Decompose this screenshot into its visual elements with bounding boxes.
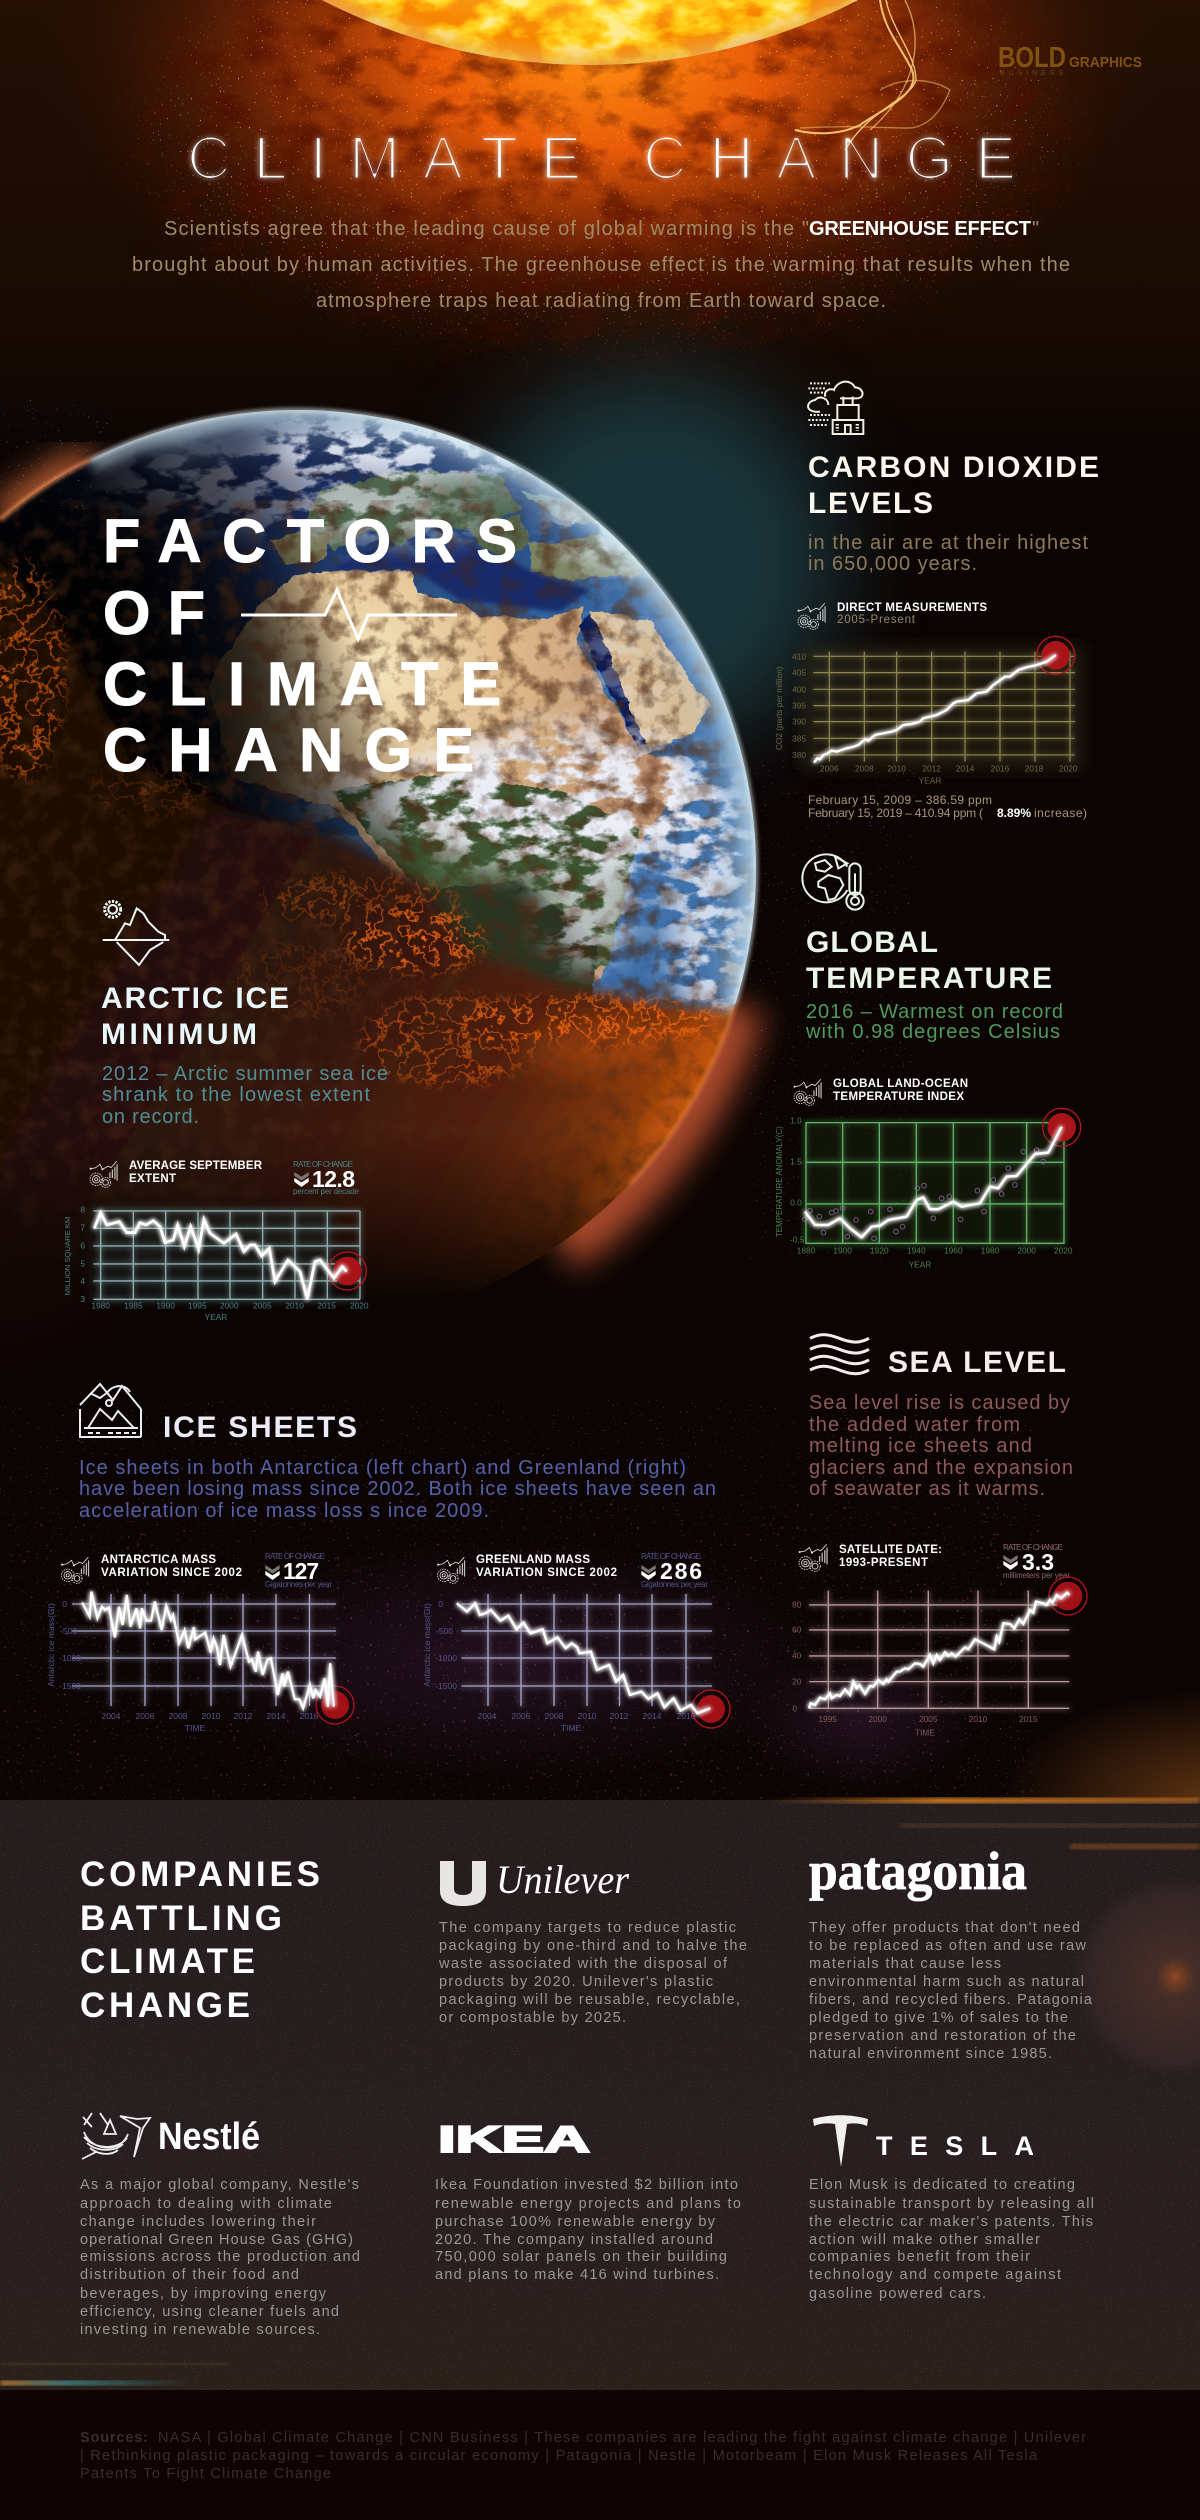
text: highest in 650,000 years: [808, 532, 1088, 575]
text: lowest extent: on record.: [102, 1106, 199, 1128]
icon: snowy mountains: [80, 1384, 141, 1437]
intro text: [132, 218, 1070, 312]
text: sources: Patents To Fight Climate Change: [80, 2466, 331, 2482]
heading: companies battling climate change: CLIMATE: [80, 1942, 255, 1981]
logo: unilever: [440, 1857, 629, 1906]
earth: mediterranean: [330, 540, 590, 612]
chart: sea level: 2000: [868, 1714, 887, 1724]
chart: sea level: 80: [792, 1600, 802, 1610]
section: carbon dioxide: [774, 382, 1099, 820]
chart: CO2: 2008: [855, 763, 874, 773]
chart title: average september extent: [90, 1160, 263, 1187]
chart: arctic extent: 8: [80, 1205, 85, 1215]
chart: CO2: 395: [792, 701, 806, 711]
stat: rate of change 12.8: [293, 1160, 360, 1196]
text: nestle: beverages, by improving energy: [80, 2286, 327, 2302]
chart: CO2: 400: [792, 684, 806, 694]
chart: temperature: 0.0: [790, 1198, 802, 1208]
text: patagonia: fibers, and recycled fibers. Patagonia: [809, 1992, 1093, 2008]
chart: sea level: [792, 1577, 1087, 1737]
text: ice sheets description: [79, 1457, 716, 1522]
sun: [322, 0, 858, 65]
chart: CO2: 385: [792, 733, 806, 743]
chart: temperature: 1920: [870, 1246, 889, 1256]
intro text: atmosphere traps heat radiating from Earth toward space.: [316, 290, 886, 312]
chart: sea level: 2015: [1019, 1714, 1038, 1724]
text: patagonia: preservation and restoration of the: [809, 2028, 1076, 2044]
text: sea level description: the added water from: [809, 1414, 1020, 1436]
text: unilever: or compostable by 2025.: [439, 2010, 626, 2026]
text: nestle: emissions across the production and: [80, 2249, 360, 2265]
logo: ikea: IKEA: [438, 2119, 590, 2160]
text: patagonia: [809, 1920, 1093, 2062]
chart: antarctica: 2010: [202, 1711, 221, 1721]
chart: temperature: 1940: [907, 1246, 926, 1256]
stat: rate of change 127: RATE OF CHANGE: [265, 1552, 325, 1561]
section: sea level: [792, 1335, 1087, 1737]
title: CLIMATE CHANGE: [187, 124, 1016, 192]
chart: CO2: 390: [792, 717, 806, 727]
chart title: satellite data: 1993-PRESENT: [839, 1557, 928, 1569]
icon: factory and clouds: [808, 382, 863, 434]
intro text: Scientists agree that the leading cause of global warming is the ": [164, 218, 809, 240]
text: unilever: waste associated with the disposal of: [438, 1956, 728, 1972]
chart: temperature: [775, 1108, 1081, 1270]
text: nestle: efficiency, using cleaner fuels and: [80, 2304, 339, 2320]
stat: rate of change 12.8: 12.8: [312, 1166, 355, 1192]
chart: antarctica: [46, 1592, 354, 1733]
section: arctic ice minimum: [63, 901, 388, 1322]
heading: factors of climate change: CHANGE: [103, 716, 474, 784]
chart: sea level: 0: [792, 1703, 797, 1713]
heading: ice sheets: ICE SHEETS: [163, 1411, 357, 1444]
logo: nestle: [82, 2113, 260, 2159]
chart: CO2: 405: [792, 668, 806, 678]
icon: sun and iceberg: [103, 901, 169, 965]
earth: bright rim: [90, 404, 760, 1005]
text: tesla: action will make other smaller: [809, 2232, 1040, 2248]
heading: factors of climate change: [103, 507, 517, 784]
heading: companies battling climate change: COMPANIES: [80, 1855, 320, 1894]
text: unilever: products by 2020. Unilever's plastic: [439, 1974, 713, 1990]
text: ice sheets description: acceleration of ice mass loss s ince 2009.: [79, 1500, 489, 1522]
company: tesla: [809, 2115, 1094, 2302]
intro text: GREENHOUSE EFFECT: [809, 218, 1031, 240]
text: patagonia: They offer products that don't need: [809, 1920, 1080, 1936]
heading: companies battling climate change: BATTLING: [80, 1899, 282, 1938]
text: sea level description: melting ice sheets and: [809, 1435, 1032, 1457]
chart title: antarctica mass variation: VARIATION SINCE 2002: [101, 1567, 242, 1579]
chart title: land-ocean index: TEMPERATURE INDEX: [833, 1091, 964, 1103]
chart: CO2: 380: [792, 750, 806, 760]
earth globe: [0, 410, 756, 1326]
heading: companies battling climate change: CHANGE: [80, 1986, 250, 2025]
text: lowest extent: 2012 – Arctic summer sea ice: [102, 1063, 388, 1085]
chart: antarctica: 2006: [136, 1711, 155, 1721]
chart: greenland: 2016: [677, 1711, 696, 1721]
chart: sea level: TIME: [915, 1727, 935, 1737]
chart: CO2: 2020: [1059, 763, 1078, 773]
text: tesla: technology and compete against: [809, 2267, 1061, 2283]
icon: globe and thermometer: [802, 854, 864, 910]
chart: antarctica: TIME: [185, 1723, 205, 1733]
text: tesla: the electric car maker's patents. This: [809, 2214, 1093, 2230]
text: sources: [80, 2430, 1086, 2482]
chart: temperature: 1.0: [790, 1116, 802, 1126]
company: patagonia: [809, 1841, 1093, 2062]
text: tesla: companies benefit from their: [809, 2249, 1030, 2265]
text: warmest on record: with 0.98 degrees Celsius: [805, 1021, 1060, 1043]
heading: carbon dioxide levels: LEVELS: [808, 487, 933, 520]
heading: carbon dioxide levels: [808, 451, 1099, 520]
heading: arctic ice minimum: MINIMUM: [101, 1018, 257, 1051]
text: sea level description: [809, 1392, 1073, 1500]
text: tesla: Elon Musk is dedicated to creating: [809, 2177, 1075, 2193]
logo: Bold Business Graphics: GRAPHICS: [1069, 54, 1142, 71]
solar flare wisps: [795, 0, 950, 150]
text: warmest on record: 2016 – Warmest on record: [806, 1001, 1063, 1023]
text: warmest on record: [805, 1001, 1063, 1043]
text: ikea: 2020. The company installed around: [435, 2232, 713, 2248]
text: sea level description: of seawater as it warms.: [809, 1478, 1045, 1500]
heading: sea level: SEA LEVEL: [888, 1346, 1066, 1379]
earth: ocean: [10, 410, 756, 1236]
chart: greenland: -1500: [435, 1681, 457, 1691]
text: unilever: packaging will be reusable, recyclable,: [439, 1992, 740, 2008]
background: starfield and nebula: [0, 1400, 1200, 1910]
text: February readings: 8.89%: [997, 806, 1031, 820]
stat: rate of change 3.3: 3.3: [1022, 1549, 1054, 1575]
heading: global temperature: [806, 926, 1052, 995]
chart: arctic extent: [63, 1205, 369, 1322]
chart: antarctica: 0: [62, 1599, 67, 1609]
logo: nestle: Nestlé: [158, 2116, 260, 2158]
heading: factors of climate change: OF: [103, 579, 205, 647]
text: unilever: packaging by one-third and to halve the: [439, 1938, 747, 1954]
chart: greenland: Antarctic ice mass(Gt): [422, 1603, 432, 1687]
section: global temperature: [775, 854, 1081, 1270]
chart: antarctica: 2014: [267, 1711, 286, 1721]
chart title: satellite data: SATELLITE DATE:: [839, 1544, 942, 1556]
chart: temperature: 2020: [1054, 1246, 1073, 1256]
logo: unilever: Unilever: [496, 1857, 629, 1902]
chart: sea level: 20: [792, 1677, 802, 1687]
chart: greenland: 2014: [643, 1711, 662, 1721]
text: patagonia: materials that cause less: [809, 1956, 1001, 1972]
text: ikea: [435, 2177, 741, 2283]
chart: arctic extent: 4: [80, 1276, 85, 1286]
logo: Bold Business Graphics: BOLD: [998, 42, 1066, 74]
chart: CO2: 2010: [887, 763, 906, 773]
chart: temperature: 1980: [981, 1246, 1000, 1256]
stat: rate of change 286: Gigatonnes per year: [641, 1580, 708, 1589]
stat: rate of change 127: Gigatonnes per year: [265, 1580, 332, 1589]
company: nestle: [80, 2113, 360, 2338]
text: nestle: change includes lowering their: [80, 2214, 316, 2230]
stat: rate of change 286: [641, 1552, 708, 1589]
chart: greenland: -1000: [435, 1653, 457, 1663]
chart: arctic extent: 2010: [285, 1301, 304, 1311]
logo: Bold Business Graphics: BUSINESS: [1000, 70, 1063, 77]
chart: CO2: 2018: [1025, 763, 1044, 773]
chart: antarctica: 2008: [169, 1711, 188, 1721]
chart title: greenland mass variation: VARIATION SINCE 2002: [476, 1567, 617, 1579]
text: patagonia: to be replaced as often and use raw: [809, 1938, 1087, 1954]
earth: land texture: [254, 470, 720, 1008]
text: ikea: renewable energy projects and plans to: [435, 2196, 741, 2212]
chart: sea level: 2010: [969, 1714, 988, 1724]
text: ikea: 750,000 solar panels on their building: [435, 2249, 727, 2265]
chart: antarctica: -1500: [59, 1681, 81, 1691]
chart: arctic extent: 2005: [253, 1301, 272, 1311]
company: unilever: [438, 1857, 747, 2026]
chart title: average september extent: AVERAGE SEPTEMBER: [129, 1160, 263, 1172]
text: tesla: sustainable transport by releasing all: [809, 2196, 1094, 2212]
chart: arctic extent: 2020: [350, 1301, 369, 1311]
text: sources: | Rethinking plastic packaging – towards a circular economy | Patagonia | Nestle | Motorbeam | Elon Musk Releases All Tesla: [80, 2448, 1038, 2464]
heading: factors of climate change: CLIMATE: [103, 650, 501, 718]
chart: arctic extent: 3: [80, 1294, 85, 1304]
text: patagonia: pledged to give 1% of sales to the: [809, 2010, 1068, 2026]
chart: CO2: 2006: [820, 763, 839, 773]
text: February readings: [808, 793, 1087, 820]
chart: temperature: YEAR: [909, 1260, 931, 1270]
chart: arctic extent: 1985: [124, 1301, 143, 1311]
chart: greenland: 0: [438, 1599, 443, 1609]
chart title: direct measurements: DIRECT MEASUREMENTS: [837, 602, 987, 614]
text: ikea: and plans to make 416 wind turbines.: [435, 2267, 719, 2283]
text: sources: Sources:: [80, 2430, 148, 2446]
chart: CO2: CO2 (parts per million): [774, 666, 784, 750]
chart: greenland: -500: [436, 1626, 453, 1636]
chart: temperature: -0.5: [790, 1234, 805, 1244]
text: nestle: investing in renewable sources.: [80, 2322, 320, 2338]
chart title: direct measurements: [798, 602, 987, 629]
earth: lava zone: [0, 500, 756, 1326]
text: February readings: increase): [1034, 806, 1087, 820]
footer: [0, 2390, 1200, 2520]
chart: arctic extent: YEAR: [205, 1312, 227, 1322]
heading: factors of climate change: FACTORS: [103, 507, 517, 575]
section: ice sheets: [46, 1384, 730, 1733]
stat: rate of change 3.3: RATE OF CHANGE: [1003, 1543, 1063, 1552]
chart: temperature: 1880: [797, 1246, 816, 1256]
chart title: land-ocean index: GLOBAL LAND-OCEAN: [833, 1078, 968, 1090]
chart: sea level: 60: [792, 1625, 802, 1635]
text: nestle: approach to dealing with climate: [80, 2196, 332, 2212]
chart title: greenland mass variation: GREENLAND MASS: [476, 1554, 590, 1566]
chart: antarctica: -500: [60, 1626, 77, 1636]
panel: companies: [0, 1798, 1200, 2390]
text: ikea: Ikea Foundation invested $2 billion into: [435, 2177, 738, 2193]
text: nestle: As a major global company, Nestle's: [80, 2177, 359, 2193]
atmosphere glow: [0, 370, 840, 1244]
text: nestle: distribution of their food and: [80, 2267, 299, 2283]
text: sources: NASA | Global Climate Change | CNN Business | These companies are leading the fight against climate change | Unilever: [158, 2430, 1086, 2446]
chart: greenland: [422, 1594, 730, 1733]
chart title: direct measurements: 2005-Present: [837, 614, 916, 626]
chart title: satellite data: [799, 1544, 942, 1571]
chart: antarctica: -1000: [59, 1653, 81, 1663]
earth: night shadow: [0, 428, 420, 877]
text: February readings: February 15, 2009 – 386.59 ppm: [808, 793, 992, 807]
text: tesla: [809, 2177, 1094, 2302]
chart: arctic extent: 7: [80, 1223, 85, 1233]
background: sun fire glow: [0, 0, 1200, 1380]
text: February readings: February 15, 2019 – 410.94 ppm (: [808, 806, 983, 820]
chart: sea level: 1995: [818, 1714, 837, 1724]
stat: rate of change 12.8: percent per decade: [293, 1187, 360, 1196]
heading: carbon dioxide levels: CARBON DIOXIDE: [808, 451, 1099, 484]
text: patagonia: natural environment since 1985.: [809, 2046, 1052, 2062]
intro text: brought about by human activities. The greenhouse effect is the warming that results when the: [132, 254, 1070, 276]
text: lowest extent: shrank to the lowest extent: [102, 1084, 370, 1106]
chart: temperature: 2000: [1017, 1246, 1036, 1256]
chart: arctic extent: 5: [80, 1259, 85, 1269]
chart: CO2: [774, 636, 1085, 786]
icon: waves: [810, 1335, 869, 1374]
chart: antarctica: 2004: [102, 1711, 121, 1721]
stat: rate of change 286: RATE OF CHANGE: [641, 1552, 701, 1561]
chart: arctic extent: MILLION SQUARE KM: [63, 1217, 72, 1295]
chart: arctic extent: 1995: [188, 1301, 207, 1311]
intro text: ": [1032, 218, 1039, 240]
chart title: land-ocean index: [794, 1078, 968, 1105]
chart: arctic extent: 1990: [156, 1301, 175, 1311]
background: stars near earth: [0, 400, 915, 1260]
text: patagonia: environmental harm such as natural: [809, 1974, 1084, 1990]
chart: greenland: TIME: [561, 1723, 581, 1733]
chart: annual scatter points: [803, 1148, 1046, 1241]
chart title: greenland mass variation: [438, 1554, 617, 1583]
text: unilever: [438, 1920, 747, 2026]
logo: tesla: [813, 2115, 1034, 2167]
chart: CO2: 2016: [991, 763, 1010, 773]
text: unilever: The company targets to reduce plastic: [439, 1920, 736, 1936]
chart: antarctica: Antarctic ice mass(Gt): [46, 1603, 56, 1687]
chart: greenland: 2006: [512, 1711, 531, 1721]
chart: arctic extent: 2015: [317, 1301, 336, 1311]
heading: companies battling climate change: [80, 1855, 320, 2025]
stat: rate of change 286: 286: [660, 1558, 702, 1584]
heading: global temperature: TEMPERATURE: [806, 962, 1052, 995]
text: highest in 650,000 years: in the air are at their highest: [808, 532, 1088, 554]
chart: antarctica: 2016: [300, 1711, 319, 1721]
chart title: antarctica mass variation: ANTARCTICA MASS: [101, 1554, 216, 1566]
text: nestle: operational Green House Gas (GHG): [80, 2232, 353, 2248]
stat: rate of change 127: [265, 1552, 332, 1589]
text: ice sheets description: have been losing mass since 2002. Both ice sheets have seen an: [79, 1478, 716, 1500]
text: ikea: purchase 100% renewable energy by: [435, 2214, 716, 2230]
stat: rate of change 127: 127: [283, 1558, 319, 1584]
chart title: average september extent: EXTENT: [129, 1173, 176, 1185]
chart: CO2: YEAR: [919, 776, 941, 786]
logo: patagonia: patagonia: [809, 1841, 1027, 1901]
chart: temperature: 1960: [944, 1246, 963, 1256]
earth: fade to background: [0, 1120, 810, 1440]
chart: antarctica: 2012: [234, 1711, 253, 1721]
heading: arctic ice minimum: ARCTIC ICE: [101, 982, 289, 1015]
icon: heartbeat line: [241, 590, 457, 639]
chart: temperature: 1.5: [790, 1157, 802, 1167]
company: ikea: [435, 2119, 741, 2283]
stat: rate of change 3.3: [1003, 1543, 1070, 1580]
text: tesla: gasoline powered cars.: [809, 2286, 986, 2302]
heading: arctic ice minimum: [101, 982, 289, 1051]
chart: sea level: 40: [792, 1651, 802, 1661]
chart title: antarctica mass variation: [62, 1554, 242, 1583]
earth: land masses: [208, 470, 712, 1010]
chart: greenland: 2004: [478, 1711, 497, 1721]
logo: tesla: TESLA: [876, 2131, 1034, 2161]
chart: greenland: 2010: [578, 1711, 597, 1721]
stat: rate of change 3.3: millimeters per year: [1003, 1571, 1070, 1580]
text: sea level description: Sea level rise is caused by: [809, 1392, 1070, 1414]
chart: temperature: 1900: [833, 1246, 852, 1256]
chart: CO2: 410: [792, 651, 806, 661]
text: nestle: [80, 2177, 360, 2338]
text: lowest extent: [102, 1063, 388, 1128]
text: sea level description: glaciers and the expansion: [809, 1457, 1073, 1479]
chart: greenland: 2008: [545, 1711, 564, 1721]
chart: arctic extent: 2000: [220, 1301, 239, 1311]
chart: arctic extent: 1980: [91, 1301, 110, 1311]
text: ice sheets description: Ice sheets in both Antarctica (left chart) and Greenland (right): [79, 1457, 686, 1479]
chart: CO2: 2014: [956, 763, 975, 773]
earth: limb highlight: [0, 410, 756, 1184]
chart: sea level: 2005: [919, 1714, 938, 1724]
chart: CO2: 2012: [922, 763, 941, 773]
text: highest in 650,000 years: in 650,000 years.: [808, 553, 977, 575]
stat: rate of change 12.8: RATE OF CHANGE: [293, 1160, 353, 1169]
logo: Bold Business Graphics: [998, 42, 1142, 77]
chart: temperature: TEMPERATURE ANOMALY(C): [775, 1126, 784, 1237]
chart: arctic extent: 6: [80, 1240, 85, 1250]
chart: greenland: 2012: [610, 1711, 629, 1721]
heading: global temperature: GLOBAL: [806, 926, 938, 959]
earth: clouds: [90, 412, 756, 1018]
